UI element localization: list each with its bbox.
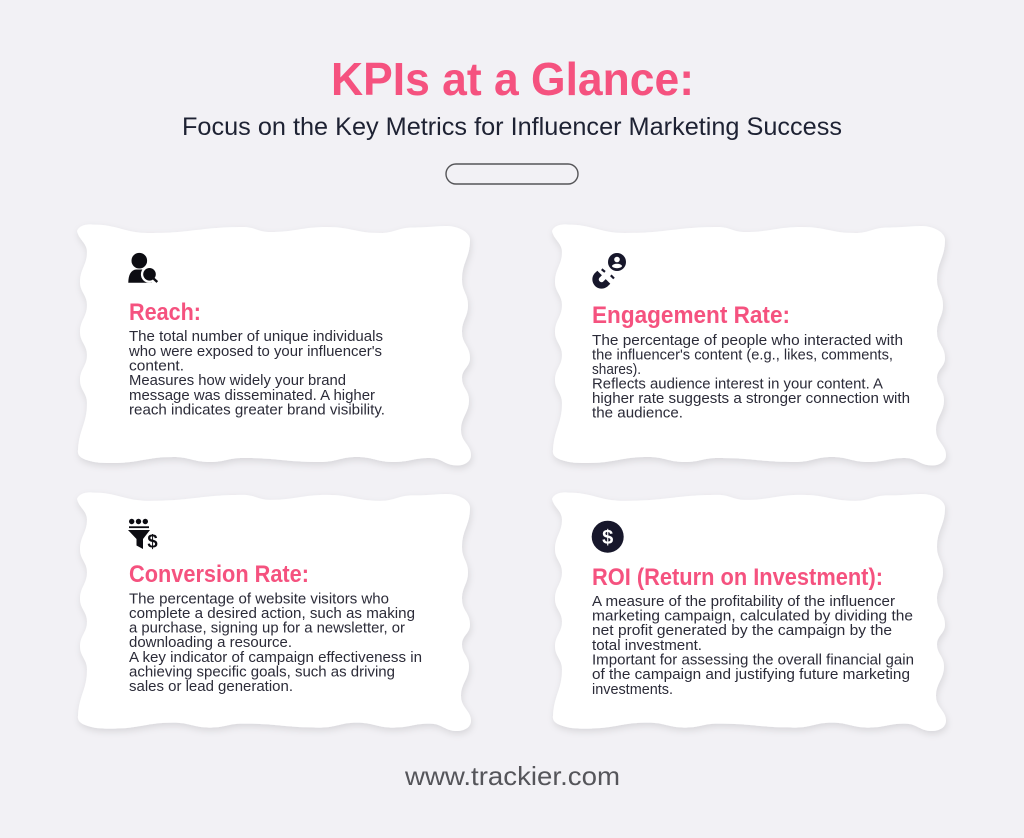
text block: conversion description: complete a desired action, such as making <box>129 606 415 622</box>
pill outline <box>446 164 578 184</box>
text block: conversion description: sales or lead generation. <box>129 679 293 695</box>
text block: engagement description: the audience. <box>592 406 683 422</box>
text block: roi description: Important for assessing the overall financial gain <box>592 652 914 668</box>
text block: engagement description: The percentage of people who interacted with <box>592 333 903 349</box>
text block: roi description: marketing campaign, calculated by dividing the <box>592 608 913 624</box>
icon: funnel with people and dollar <box>128 519 158 552</box>
text block: engagement description: higher rate suggests a stronger connection with <box>592 391 910 407</box>
text block: reach description: who were exposed to your influencer's <box>128 344 382 360</box>
text block: conversion description <box>129 592 422 695</box>
icon: funnel with people and dollar: $ <box>147 530 158 552</box>
text block: engagement description: shares). <box>592 362 641 378</box>
text block: engagement description: Reflects audience interest in your content. A <box>592 376 883 392</box>
icon: person with magnifier <box>128 253 158 283</box>
text block: roi description: investments. <box>592 682 673 698</box>
text block: conversion description: achieving specific goals, such as driving <box>129 664 395 680</box>
heading: conversion rate: Conversion Rate: <box>129 561 309 588</box>
text block: roi description <box>592 594 914 698</box>
text block: reach description: Measures how widely your brand <box>129 373 346 389</box>
text block: roi description: of the campaign and justifying future marketing <box>592 667 910 683</box>
panel: reach <box>77 224 471 466</box>
text block: engagement description <box>592 333 910 422</box>
panel: roi <box>552 492 946 731</box>
text block: reach description: content. <box>129 358 184 374</box>
heading: reach: Reach: <box>129 299 201 326</box>
text block: conversion description: a purchase, signing up for a newsletter, or <box>129 620 405 636</box>
text block: conversion description: A key indicator of campaign effectiveness in <box>129 650 422 666</box>
title: KPIs at a Glance: <box>331 53 694 105</box>
heading: engagement rate: Engagement Rate: <box>592 302 790 329</box>
panel: engagement rate <box>552 224 946 466</box>
text block: conversion description: downloading a resource. <box>129 635 292 651</box>
icon: magnet and user <box>596 253 626 285</box>
heading: roi: ROI (Return on Investment): <box>592 564 883 591</box>
text block: reach description: The total number of unique individuals <box>129 329 383 345</box>
text block: roi description: A measure of the profitability of the influencer <box>592 594 895 610</box>
text block: reach description <box>128 329 385 418</box>
text block: roi description: total investment. <box>592 638 702 654</box>
text block: reach description: message was disseminated. A higher <box>129 388 375 404</box>
footer url: www.trackier.com <box>404 761 620 791</box>
text block: engagement description: the influencer's content (e.g., likes, comments, <box>592 348 893 364</box>
icon: dollar coin: $ <box>602 527 613 549</box>
text block: roi description: net profit generated by the campaign by the <box>592 623 892 639</box>
panel: conversion rate <box>77 492 471 731</box>
text block: conversion description: The percentage of website visitors who <box>129 592 389 608</box>
icon: dollar coin <box>592 521 624 553</box>
text block: reach description: reach indicates greater brand visibility. <box>129 402 385 418</box>
subtitle: Focus on the Key Metrics for Influencer Marketing Success <box>182 113 842 141</box>
